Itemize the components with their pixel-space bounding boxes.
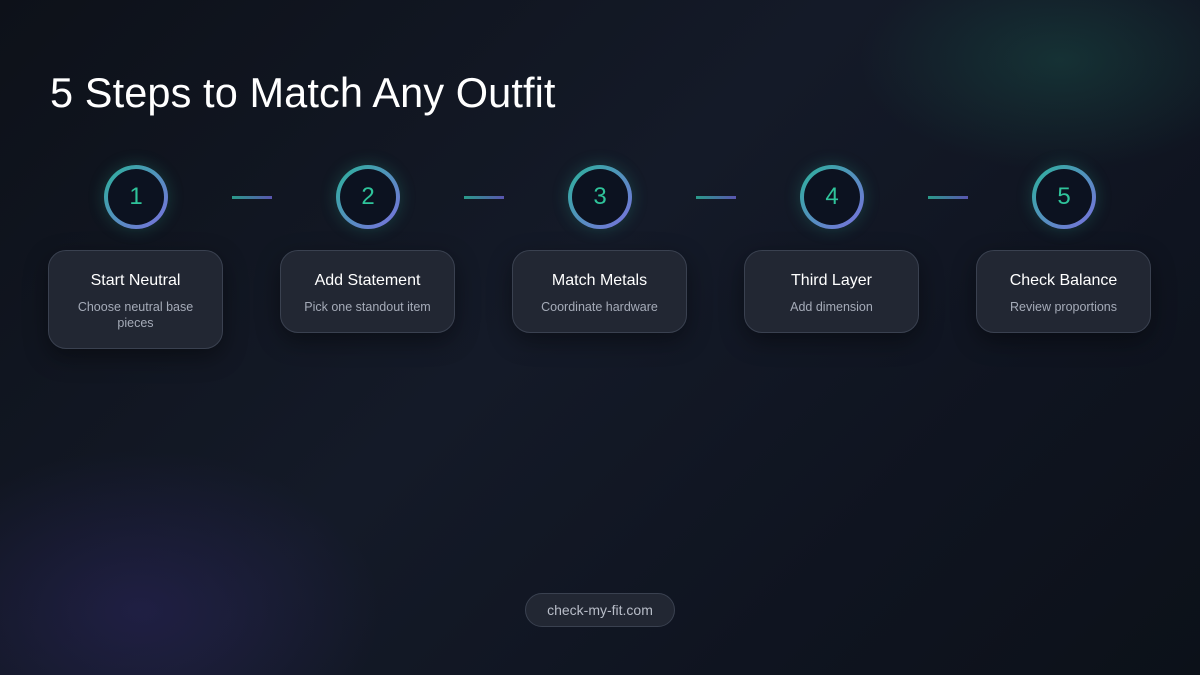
card: Match Metals — [512, 250, 687, 333]
connector 2 — [464, 196, 504, 199]
step 4 circle: 4 — [825, 183, 839, 210]
step 2 circle: 2 — [361, 183, 375, 210]
card: Add Statement — [280, 250, 455, 333]
card: Check Balance: Check Balance — [1010, 272, 1117, 289]
card: Third Layer: Add dimension — [790, 300, 873, 314]
step 5 circle — [1032, 165, 1096, 229]
card: Add Statement: Pick one standout item — [304, 300, 431, 314]
step 3 circle — [568, 165, 632, 229]
step 4 circle — [800, 165, 864, 229]
card: Match Metals: Coordinate hardware — [541, 300, 658, 314]
card: Start Neutral: pieces — [117, 316, 154, 330]
step 3 circle: 3 — [593, 183, 607, 210]
card: Check Balance — [976, 250, 1151, 333]
connector 1 — [232, 196, 272, 199]
step 2 circle — [336, 165, 400, 229]
card: Match Metals: Match Metals — [552, 272, 647, 289]
title: 5 Steps to Match Any Outfit — [50, 69, 556, 116]
card: Check Balance: Review proportions — [1010, 300, 1117, 314]
card: Third Layer — [744, 250, 919, 333]
step 1 circle: 1 — [129, 183, 143, 210]
footer url — [525, 593, 675, 627]
card: Third Layer: Third Layer — [791, 272, 872, 289]
card: Start Neutral — [48, 250, 223, 349]
step 1 circle — [104, 165, 168, 229]
footer url: check-my-fit.com — [547, 602, 653, 618]
card: Start Neutral: Choose neutral base — [78, 300, 193, 314]
connector 4 — [928, 196, 968, 199]
card: Add Statement: Add Statement — [315, 272, 420, 289]
card: Start Neutral: Start Neutral — [91, 272, 180, 289]
step 5 circle: 5 — [1057, 183, 1071, 210]
connector 3 — [696, 196, 736, 199]
